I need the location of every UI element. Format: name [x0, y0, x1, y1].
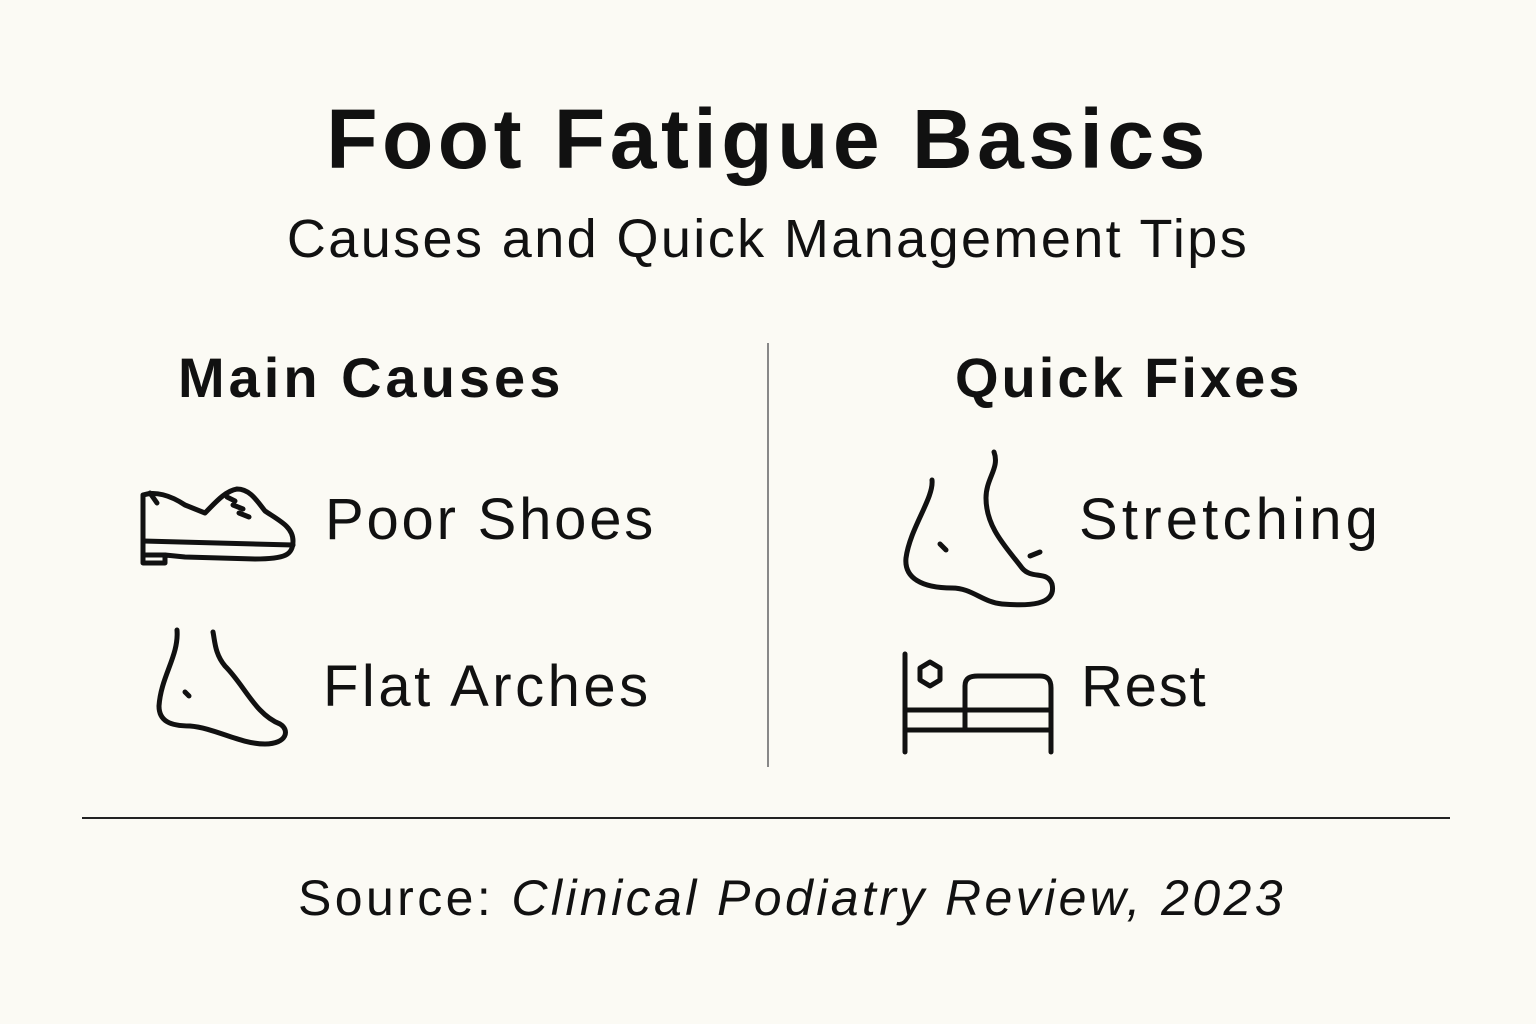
- divider vertical: [767, 343, 769, 767]
- icon: stretching foot: [903, 450, 1056, 608]
- title: Foot Fatigue Basics: [326, 92, 1210, 186]
- heading: quick fixes: Quick Fixes: [955, 346, 1302, 409]
- icon: shoe: [140, 486, 296, 566]
- label: stretching: Stretching: [1079, 487, 1382, 552]
- label: rest: Rest: [1081, 654, 1207, 719]
- icon: bed: [902, 652, 1054, 754]
- label: poor shoes: Poor Shoes: [325, 487, 656, 552]
- label: flat arches: Flat Arches: [323, 654, 652, 719]
- heading: main causes: Main Causes: [178, 346, 564, 409]
- source citation: Source: Clinical Podiatry Review, 2023: [298, 870, 1286, 926]
- subtitle: Causes and Quick Management Tips: [287, 209, 1249, 269]
- panel: quick fixes: [902, 346, 1382, 754]
- divider horizontal: [82, 817, 1450, 819]
- icon: flat foot: [156, 628, 288, 746]
- panel: main causes: [140, 346, 656, 746]
